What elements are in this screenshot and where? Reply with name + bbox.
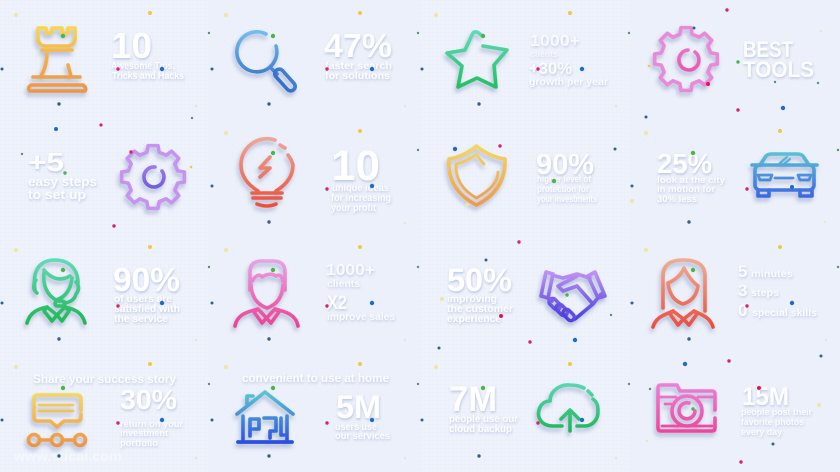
caption: users satisfied: satisfied with (114, 303, 180, 315)
panel: 7M cloud backup (449, 380, 598, 435)
stat: 30%: 30% (120, 384, 177, 415)
panel: 1000+ x2 sales (235, 261, 395, 326)
stats: 1000+ and +30% (529, 33, 608, 88)
icon: light bulb (241, 139, 293, 206)
stats: 1000+ and x2 (326, 262, 395, 323)
caption: users satisfied: the service (114, 313, 168, 325)
stat: 7M: 7M (449, 380, 497, 419)
stats: 1000+ and x2: 1000+ (326, 262, 375, 279)
heading: convenient to use at home: convenient to use at home (242, 371, 389, 385)
stat: 90%: 90% (536, 149, 594, 181)
caption: customer experience (447, 293, 513, 325)
icon: car (752, 154, 817, 196)
list: minutes steps skills: steps (751, 287, 779, 299)
caption: protection: higher level of (537, 174, 592, 184)
icon: chat timeline (28, 395, 86, 446)
caption: return on investment (120, 419, 183, 449)
stats: 1000+ and +30%: growth per year (529, 76, 608, 88)
icon: pink gear (655, 28, 717, 90)
caption: tips (111, 61, 184, 82)
caption: cloud backup (449, 413, 518, 435)
stat: 50%: 50% (447, 262, 512, 298)
caption: protection: your investments (537, 194, 597, 204)
list: minutes steps skills: special skills (752, 307, 817, 319)
stat: 10: 10 (331, 142, 380, 190)
stats: 1000+ and +30%: 1000+ (530, 33, 580, 50)
heading: best tools: BEST (743, 37, 793, 62)
icon: magnifier (237, 32, 297, 93)
caption: faster search: faster search (325, 60, 392, 72)
caption: return on investment: investment (120, 428, 169, 439)
caption: faster search (325, 60, 392, 82)
icon: man bust (235, 261, 298, 326)
caption: city motion: look at the city (657, 175, 726, 186)
panel: +5 easy steps (28, 146, 184, 208)
panel: 10 awesome tips (29, 25, 184, 91)
panel: 90% protection (449, 146, 597, 205)
panel: 1000+ clients (447, 32, 608, 88)
stats: 1000+ and +30%: +30% (529, 59, 572, 78)
heading: share your success story: Share your success story (33, 372, 176, 386)
caption: easy steps: easy steps (28, 174, 97, 189)
caption: tips: Awesome Tips, (111, 61, 175, 72)
caption: protection (537, 174, 597, 204)
caption: users satisfied (114, 293, 180, 325)
caption: users use services: users use (335, 422, 377, 433)
stat: 25%: 25% (657, 148, 712, 179)
panel: 30% share success story (13, 372, 183, 464)
list: minutes steps skills: 5 (738, 262, 747, 281)
icon: handshake (541, 272, 605, 322)
stats: 1000+ and x2: clients (327, 278, 360, 290)
heading: best tools (743, 37, 814, 82)
caption: customer experience: experience (447, 313, 501, 325)
caption: city motion: 30% less (657, 194, 697, 205)
caption: favorite photos: favorite photos (741, 417, 804, 428)
caption: easy steps (28, 174, 97, 202)
caption: favorite photos (741, 407, 812, 438)
caption: faster search: for solutions (325, 70, 390, 82)
icon: chess rook (29, 28, 86, 91)
caption: unique ideas (331, 183, 391, 214)
caption: unique ideas: for increasing (331, 193, 391, 204)
caption: protection: protection for (537, 184, 589, 194)
stat: 15M: 15M (742, 383, 789, 411)
stat: 10: 10 (111, 25, 152, 66)
panel: 5 minutes 3 steps (653, 260, 817, 327)
panel: 50% customer experience (447, 262, 605, 325)
list: minutes steps skills: 3 (738, 281, 747, 300)
panel: 15M photos (658, 383, 812, 438)
icon: cloud upload (539, 385, 598, 431)
caption: cloud backup: cloud backup (449, 423, 512, 435)
caption: unique ideas: your profit (331, 203, 377, 214)
icon: camera (658, 385, 715, 431)
caption: easy steps: to set up (28, 187, 86, 202)
caption: favorite photos: people post their (741, 407, 812, 418)
stat: +5: +5 (28, 147, 64, 177)
caption: favorite photos: every day (741, 427, 783, 438)
icon: house (237, 392, 293, 442)
panel: 5M convenient at home (237, 371, 390, 442)
caption: return on investment: portfolio (120, 438, 158, 449)
caption: tips: Tricks and Hacks (112, 71, 184, 82)
panel: 25% city (657, 148, 817, 205)
caption: customer experience: improving (447, 293, 497, 305)
panel: 47% faster search (237, 27, 392, 93)
caption: users use services: our services (335, 431, 390, 442)
caption: customer experience: the customer (447, 303, 513, 315)
panel: 90% users satisfied (27, 260, 180, 325)
stat: 5M: 5M (336, 389, 381, 425)
stat: 90%: 90% (113, 261, 180, 298)
watermark: www.sucai.com (13, 448, 122, 464)
icon: purple gear (122, 146, 184, 208)
stats: 1000+ and x2: X2 (327, 293, 347, 314)
icon: shield (449, 146, 505, 205)
caption: users satisfied: of users are (114, 293, 172, 305)
stat: 47%: 47% (324, 27, 392, 64)
stats: 1000+ and +30%: clients (530, 49, 558, 59)
caption: users use services (335, 422, 390, 442)
caption: cloud backup: people use our (449, 413, 518, 425)
stats: 1000+ and x2: improve sales (327, 311, 395, 323)
list: minutes steps skills: 0 (738, 301, 747, 320)
panel: 10 unique ideas (241, 139, 391, 214)
icon: woman bust (653, 260, 713, 327)
caption: city motion (657, 175, 726, 205)
caption: city motion: in motion for (657, 184, 715, 195)
caption: unique ideas: unique ideas (332, 183, 389, 194)
list: minutes steps skills (738, 262, 817, 320)
icon: star (447, 32, 507, 87)
list: minutes steps skills: minutes (751, 268, 793, 280)
caption: return on investment: return on your (120, 419, 183, 430)
heading: best tools: TOOLS (743, 57, 814, 82)
panel: best tools (655, 28, 814, 90)
icon: headset agent (27, 260, 85, 323)
